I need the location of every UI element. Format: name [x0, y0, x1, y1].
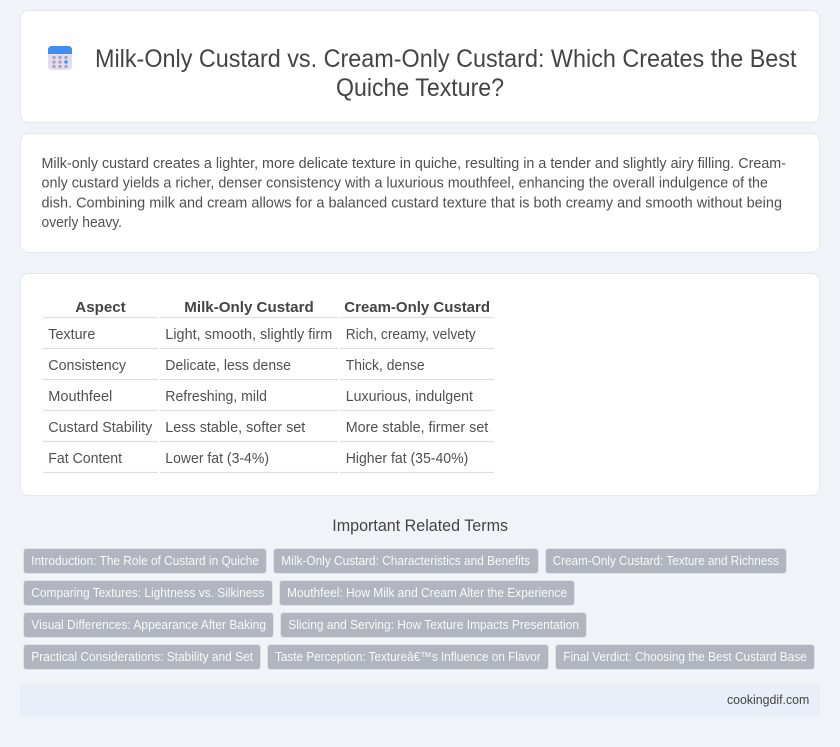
tag: Slicing and Serving: How Texture Impacts Presentation — [288, 618, 579, 632]
table header row: Cream-Only Custard — [344, 299, 490, 316]
tag: Cream-Only Custard: Texture and Richness — [553, 554, 779, 568]
table row: fat content — [48, 451, 468, 467]
heading: Quiche Texture? — [336, 74, 504, 102]
paragraph: Milk-only custard creates a lighter, more delicate texture in quiche, resulting in a tender and slightly airy filling. Cream- — [42, 156, 786, 172]
tag: Introduction: The Role of Custard in Quiche — [31, 554, 259, 568]
tag: Final Verdict: Choosing the Best Custard Base — [563, 650, 807, 664]
table row: mouthfeel: Refreshing, mild — [165, 389, 267, 405]
tag: Mouthfeel: How Milk and Cream Alter the Experience — [287, 586, 567, 600]
heading — [95, 45, 797, 102]
table row: consistency: Delicate, less dense — [165, 358, 291, 374]
tag — [280, 580, 574, 606]
table header row: Aspect — [75, 299, 126, 316]
table row: custard stability: Less stable, softer set — [165, 420, 305, 436]
table row: custard stability: More stable, firmer set — [346, 420, 488, 436]
tag — [280, 612, 586, 638]
table row: custard stability: Custard Stability — [48, 420, 153, 436]
table row: fat content: Higher fat (35-40%) — [346, 451, 468, 467]
tag: Practical Considerations: Stability and Set — [31, 650, 253, 664]
tag — [24, 580, 272, 606]
tag — [24, 548, 266, 574]
panel: title header — [20, 10, 820, 122]
table row: fat content: Lower fat (3-4%) — [165, 451, 269, 467]
table header row — [75, 299, 490, 316]
table row: mouthfeel: Luxurious, indulgent — [346, 389, 473, 405]
table row: consistency: Consistency — [48, 358, 127, 374]
panel: comparison table — [20, 274, 820, 496]
tag — [546, 548, 786, 574]
tag: Taste Perception: Textureâ€™s Influence on Flavor — [275, 650, 541, 664]
table row: texture — [48, 327, 476, 343]
tag: Milk-Only Custard: Characteristics and Benefits — [281, 554, 530, 568]
table row: texture: Texture — [48, 327, 95, 343]
tag: Visual Differences: Appearance After Baking — [31, 618, 266, 632]
paragraph: overly heavy. — [42, 215, 122, 231]
panel: related term tags — [24, 548, 814, 670]
tag — [268, 644, 548, 670]
tag — [556, 644, 814, 670]
paragraph: dish. Combining milk and cream allows for a balanced custard texture that is both creamy and smooth without being — [42, 196, 782, 212]
paragraph — [42, 156, 786, 231]
tag — [24, 644, 260, 670]
paragraph: only custard yields a richer, denser consistency with a luxurious mouthfeel, enhancing the overall indulgence of the — [42, 176, 768, 192]
heading: related terms: Important Related Terms — [332, 517, 508, 535]
table row: texture: Rich, creamy, velvety — [346, 327, 476, 343]
footer bar — [20, 683, 820, 717]
table row: texture: Light, smooth, slightly firm — [165, 327, 332, 343]
panel: intro text — [20, 134, 820, 252]
icon: calendar — [48, 46, 72, 70]
table row: custard stability — [48, 420, 488, 436]
table row: mouthfeel: Mouthfeel — [48, 389, 112, 405]
tag — [274, 548, 538, 574]
table header row: Milk-Only Custard — [184, 299, 314, 316]
tag — [24, 612, 274, 638]
table row: consistency: Thick, dense — [346, 358, 425, 374]
heading: Milk-Only Custard vs. Cream-Only Custard: Which Creates the Best — [95, 45, 797, 73]
footer bar: cookingdif.com — [727, 692, 809, 707]
tag: Comparing Textures: Lightness vs. Silkiness — [31, 586, 264, 600]
table row: fat content: Fat Content — [48, 451, 122, 467]
table row: mouthfeel — [48, 389, 473, 405]
table row: consistency — [48, 358, 425, 374]
